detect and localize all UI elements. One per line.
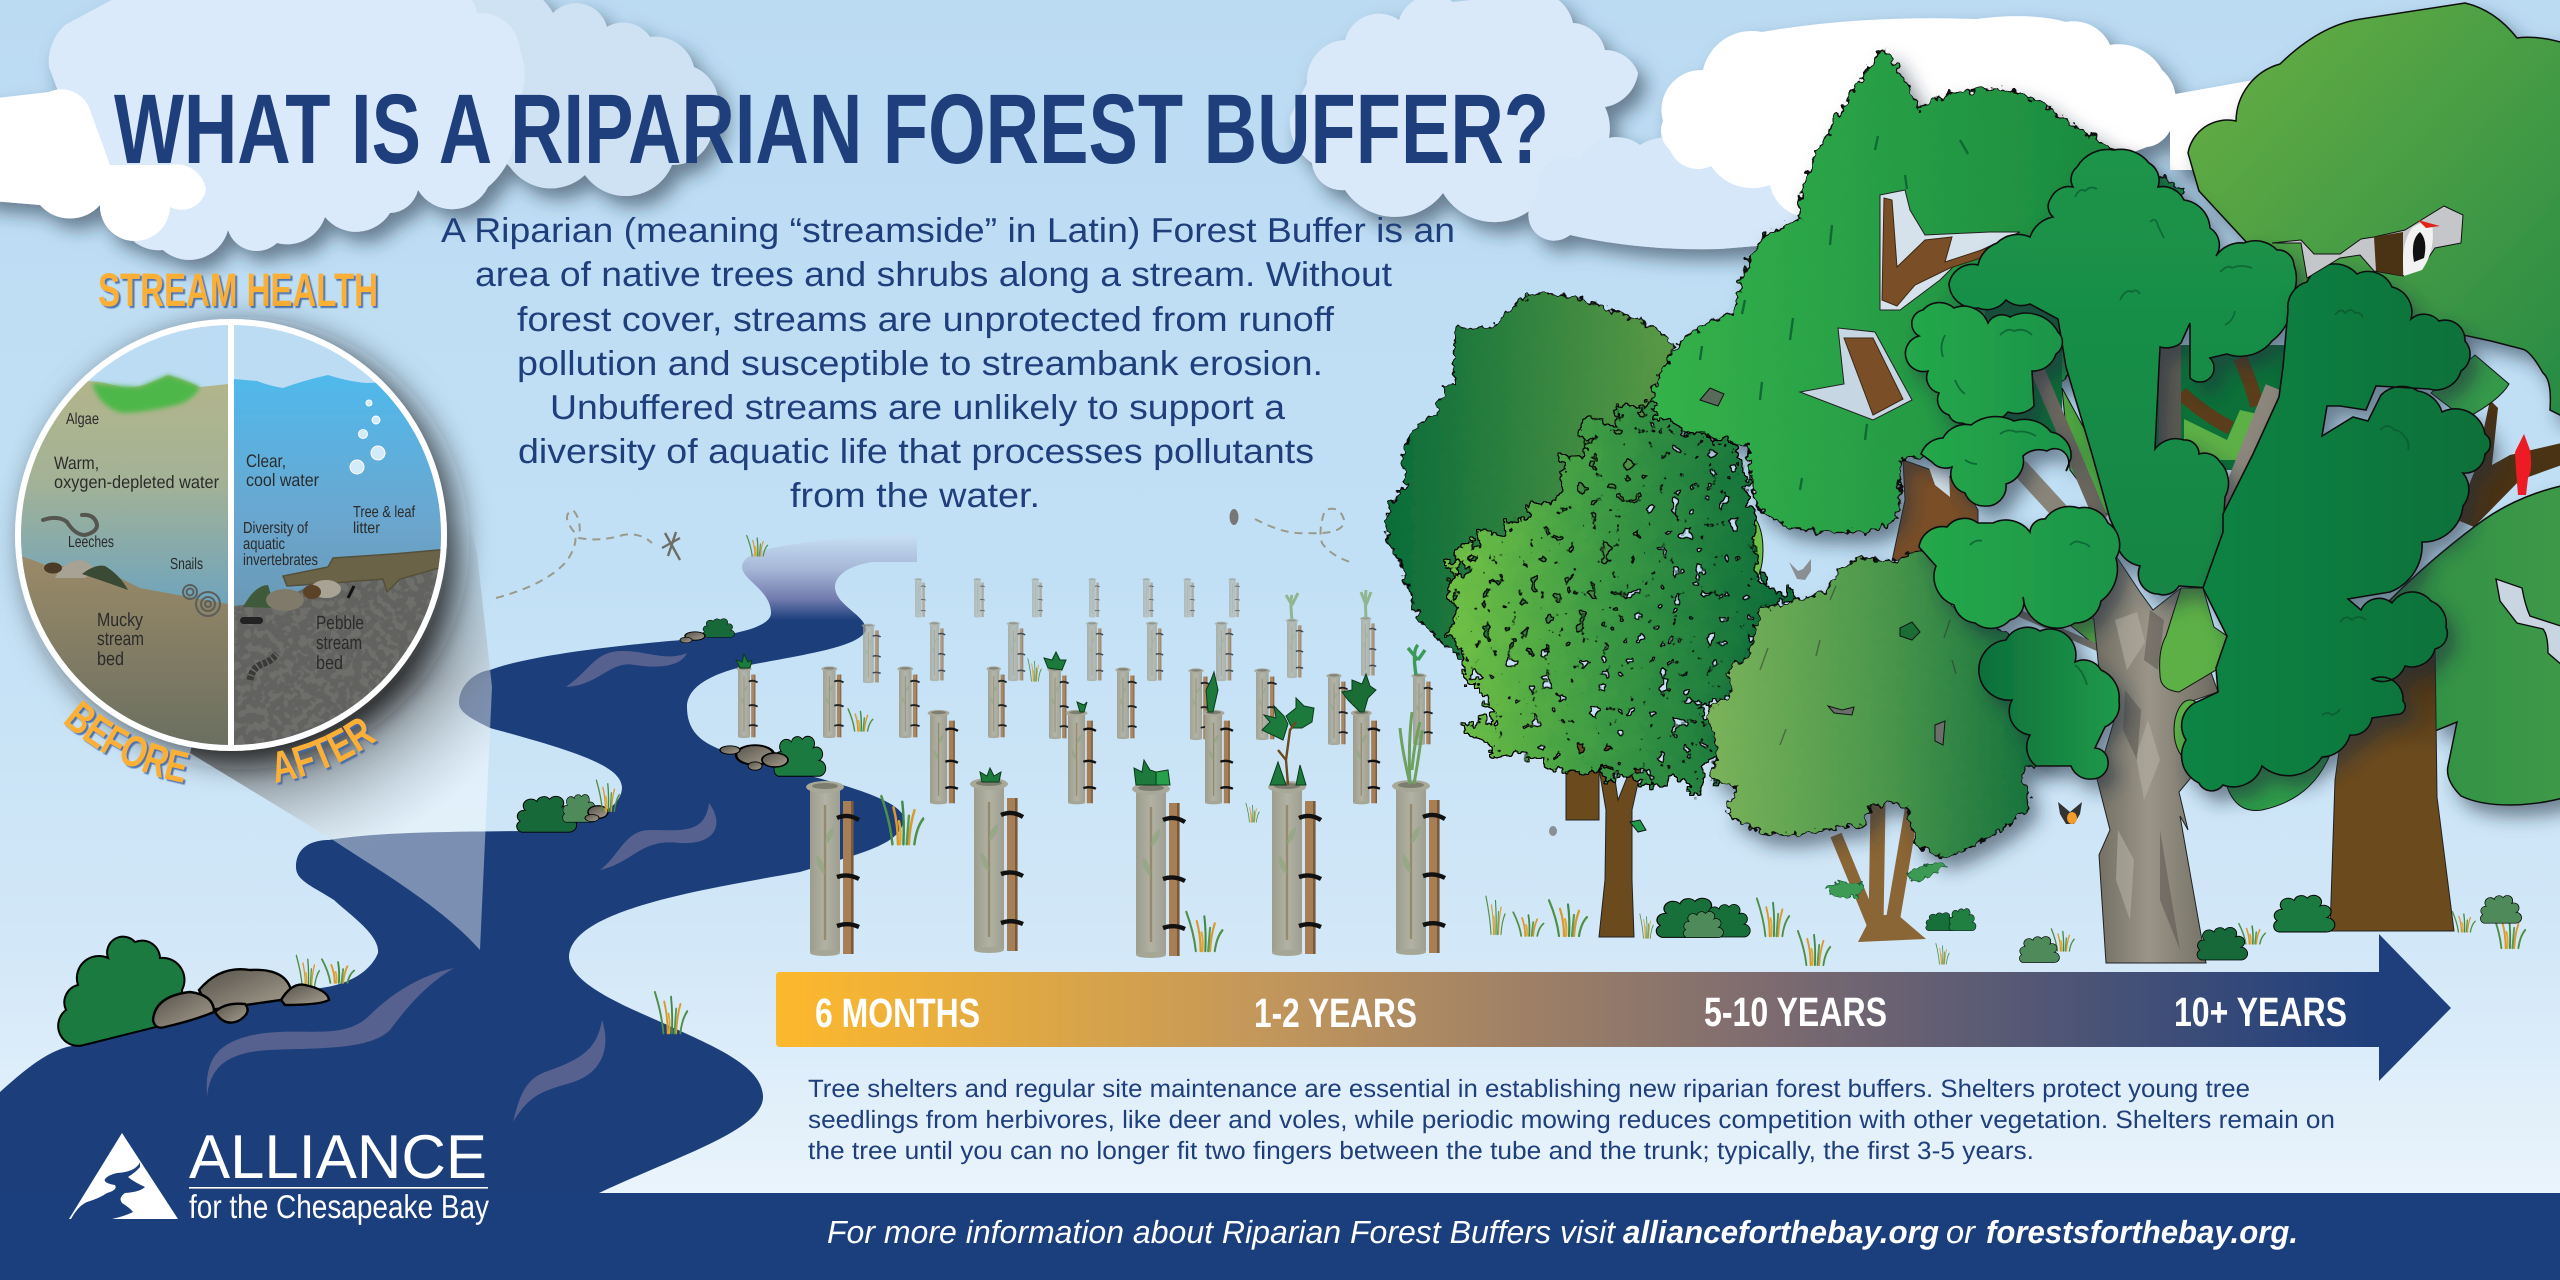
icon: mountain with river xyxy=(69,1133,178,1219)
circle labels: invertebrates xyxy=(243,552,318,569)
before half xyxy=(21,325,441,745)
grey trunk xyxy=(2092,553,2218,963)
timeline arrow: 1-2 YEARS xyxy=(1254,990,1417,1036)
before and after labels: BEFORE xyxy=(64,700,192,786)
butterfly flight path xyxy=(1230,509,1350,562)
understory bushes and grasses xyxy=(1486,895,2525,965)
callout beam from circle to river xyxy=(190,534,492,950)
river xyxy=(0,535,917,1280)
tree 1 back left xyxy=(1386,293,1674,820)
shelter description: seedlings from herbivores, like deer and voles, while periodic mowing reduces competition with other vegetation. Shelters remain on xyxy=(808,1106,2335,1134)
circle labels: Algae xyxy=(66,411,99,428)
intro paragraph: from the water. xyxy=(790,477,1040,515)
seedling leaves xyxy=(736,652,1376,785)
circle labels: Diversity of xyxy=(243,520,308,537)
footer text: For more information about Riparian Forest Buffers visit xyxy=(827,1214,1616,1250)
circle labels: aquatic xyxy=(243,536,285,553)
icon: snails xyxy=(183,585,220,616)
moth and small bird xyxy=(1549,559,2082,836)
intro paragraph: diversity of aquatic life that processes pollutants xyxy=(518,433,1314,471)
after half xyxy=(234,325,441,745)
circle labels: Snails xyxy=(170,556,203,573)
stream health circle xyxy=(0,300,464,760)
clouds top right xyxy=(1290,0,2265,249)
footer text: forestsforthebay.org. xyxy=(1986,1214,2298,1250)
rocks before xyxy=(55,560,95,578)
circle labels: litter xyxy=(353,520,381,537)
footer text: or xyxy=(1946,1214,1976,1250)
dark backing and branches xyxy=(1985,300,2062,445)
cardinal xyxy=(2515,434,2531,495)
icon: leech xyxy=(43,515,97,535)
title: WHAT IS A RIPARIAN FOREST BUFFER? xyxy=(114,73,1549,184)
branch with cardinal xyxy=(2455,400,2560,527)
logo: ALLIANCE xyxy=(189,1123,487,1192)
circle labels: stream xyxy=(97,629,144,650)
lower left bush and boulders xyxy=(58,937,329,1046)
row 2 xyxy=(928,710,958,804)
logo: for the Chesapeake Bay xyxy=(189,1188,489,1225)
footer text: allianceforthebay.org xyxy=(1623,1214,1939,1250)
icon: woodpecker xyxy=(2403,223,2433,276)
circle labels: Leeches xyxy=(68,534,114,551)
circle labels: Pebble xyxy=(316,613,364,634)
light lobes xyxy=(2160,588,2227,692)
tree 5 center with grey trunk xyxy=(1905,149,2296,963)
foliage lobes xyxy=(1905,149,2296,779)
circle labels: bed xyxy=(316,653,343,674)
circle labels: Warm, xyxy=(54,453,99,473)
tree shelter rows xyxy=(736,578,1445,958)
rocks after xyxy=(243,585,275,608)
intro paragraph: pollution and susceptible to streambank erosion. xyxy=(517,345,1323,383)
canopy gaps with branches xyxy=(1880,190,2020,310)
timeline arrow: 5-10 YEARS xyxy=(1704,989,1887,1035)
before and after labels: AFTER xyxy=(276,718,380,786)
tree back right canopy xyxy=(2188,3,2560,420)
logo xyxy=(69,1123,489,1225)
bubbles xyxy=(350,400,385,474)
circle labels xyxy=(54,411,415,674)
row 5 xyxy=(914,578,1240,617)
row 1 xyxy=(806,781,859,956)
tree 3 shrubby xyxy=(1707,550,2052,942)
dragonfly flight path xyxy=(496,510,680,598)
before and after labels xyxy=(64,700,380,786)
shelter description: Tree shelters and regular site maintenance are essential in establishing new riparian forest buffers. Shelters protect young tree xyxy=(808,1075,2250,1103)
intro paragraph: area of native trees and shrubs along a stream. Without xyxy=(475,256,1392,294)
circle labels: cool water xyxy=(246,470,319,490)
footer band xyxy=(0,1193,2560,1280)
tree lower right canopy xyxy=(2390,484,2560,805)
intro paragraph xyxy=(441,212,1455,515)
woodpecker gap xyxy=(2272,206,2463,278)
timeline arrow: 6 MONTHS xyxy=(815,990,980,1036)
timeline arrow xyxy=(776,934,2451,1081)
invertebrates xyxy=(240,617,263,624)
tree 6 front oak xyxy=(2182,264,2509,791)
bushes and rocks along river xyxy=(296,536,1259,1033)
oak trunk xyxy=(2330,638,2454,931)
underlobe below oak xyxy=(2223,757,2329,810)
circle labels: Clear, xyxy=(246,451,286,471)
intro paragraph: A Riparian (meaning “streamside” in Latin) Forest Buffer is an xyxy=(441,212,1455,250)
row 3 xyxy=(736,666,1433,745)
row 4 xyxy=(862,590,1376,683)
tree 4 upper tall xyxy=(1651,48,2184,561)
circle labels: stream xyxy=(316,633,362,654)
footer text xyxy=(827,1214,2298,1250)
intro paragraph: forest cover, streams are unprotected from runoff xyxy=(517,301,1334,339)
circle labels: Tree & leaf xyxy=(353,504,415,521)
shrub at tree 3 base xyxy=(1824,863,1946,897)
shelter description xyxy=(808,1075,2335,1165)
log xyxy=(283,549,450,592)
timeline arrow: 10+ YEARS xyxy=(2174,989,2347,1035)
river highlight streaks xyxy=(207,651,716,1122)
clouds top left xyxy=(0,0,719,260)
stream health heading: STREAM HEALTH xyxy=(98,263,378,316)
shelter description: the tree until you can no longer fit two fingers between the tube and the trunk; typically, the first 3-5 years. xyxy=(808,1137,2034,1165)
circle labels: oxygen-depleted water xyxy=(54,472,219,492)
circle labels: Mucky xyxy=(97,610,143,631)
circle labels: bed xyxy=(97,649,124,670)
tree 2 lacy xyxy=(1452,406,1787,937)
intro paragraph: Unbuffered streams are unlikely to support a xyxy=(550,389,1286,427)
